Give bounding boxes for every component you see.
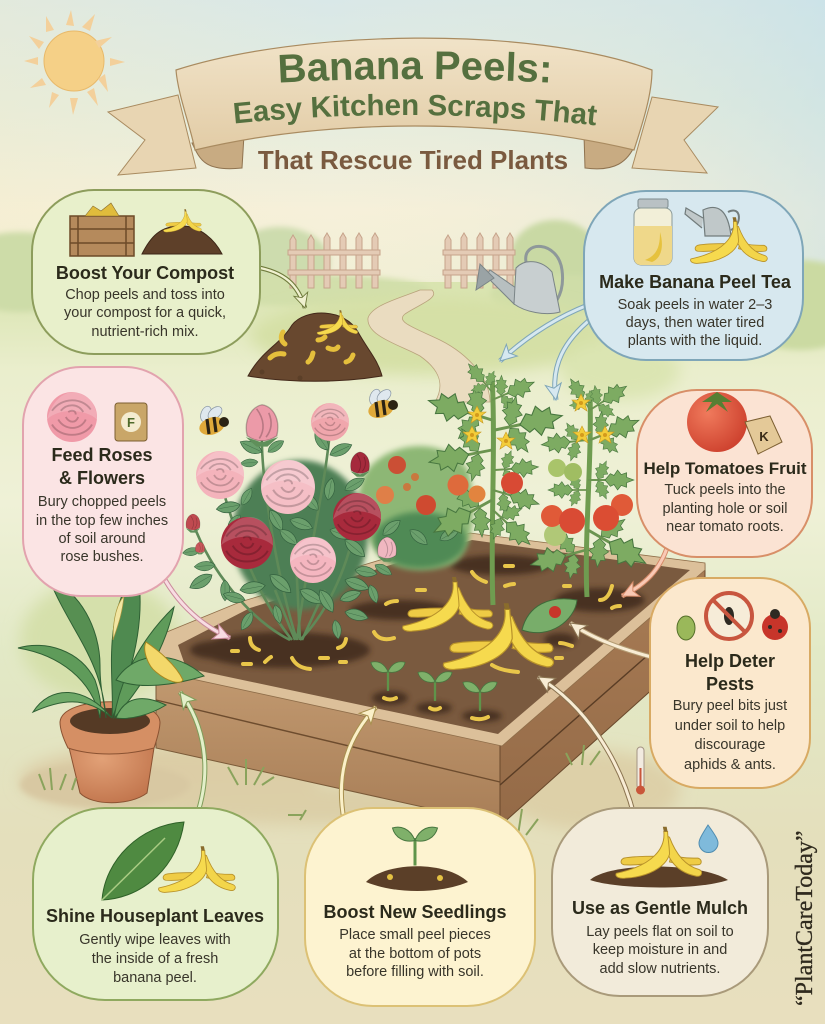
arrow: roses — [155, 560, 230, 638]
icon: ladybug — [762, 609, 788, 640]
fence: left — [288, 233, 380, 288]
icon: peel — [159, 846, 235, 892]
soft ground patches — [20, 295, 680, 830]
title banner: Easy Kitchen Scraps That — [234, 94, 597, 126]
right fold — [584, 135, 636, 169]
seedlings — [371, 662, 405, 691]
panel: feed roses: of soil around — [58, 531, 146, 547]
panel: boost your compost — [32, 190, 260, 354]
top rails — [157, 533, 705, 746]
title line 2 — [220, 115, 610, 127]
icon: jar — [634, 199, 672, 265]
icon: sun — [24, 10, 125, 115]
panel: deter pests: discourage — [695, 737, 765, 753]
title line 1 — [240, 79, 590, 85]
panel: feed roses: rose bushes. — [60, 549, 144, 565]
soil peel bits — [232, 566, 620, 719]
icon: leaf — [102, 822, 184, 900]
icon: crate — [70, 203, 134, 256]
panel: boost new seedlings: at the bottom of pots — [349, 946, 481, 962]
body: Tuck peels into the — [664, 482, 786, 498]
body: Chop peels and toss into — [65, 287, 225, 303]
arrow: compost — [255, 267, 305, 308]
heading: Boost Your Compost — [56, 263, 234, 283]
panel: boost new seedlings — [305, 808, 535, 1006]
title banner: Banana Peels: — [280, 52, 549, 82]
body: Soak peels in water 2–3 — [618, 297, 772, 313]
heading: Help Tomatoes Fruit — [643, 459, 807, 478]
left fold — [192, 135, 244, 169]
panel: feed roses — [23, 367, 183, 596]
right wood — [500, 565, 705, 826]
leaves — [18, 567, 204, 718]
tomato plant right — [524, 369, 661, 597]
heading: Use as Gentle Mulch — [572, 898, 748, 918]
icon: soil — [590, 866, 728, 888]
icon: fertilizer bag — [115, 403, 147, 441]
body: Bury peel bits just — [673, 698, 787, 714]
arrow: tea to left tomato — [500, 305, 588, 361]
arrow: mulch — [538, 677, 634, 815]
arrow: shine — [180, 692, 205, 815]
banana peels on soil — [403, 577, 493, 631]
icon: prohibition sign — [706, 593, 752, 639]
panel: shine houseplant leaves: the inside of a fresh — [92, 951, 218, 967]
icon: peel — [691, 217, 767, 263]
panel: feed roses: in the top few inches — [36, 513, 168, 529]
background ground — [0, 282, 825, 1024]
watering can — [476, 246, 563, 314]
pot — [66, 735, 156, 803]
panel: banana peel tea: days, then water tired — [626, 315, 764, 331]
arrow: pests — [570, 623, 655, 658]
icon: peel — [616, 827, 702, 878]
panel: gentle mulch — [552, 808, 768, 996]
heading: Help Deter — [685, 651, 775, 671]
arrow: tomatoes — [622, 545, 668, 596]
panel: help tomatoes: near tomato roots. — [666, 519, 784, 535]
panel: boost your compost: nutrient-rich mix. — [91, 324, 199, 340]
title line 3: That Rescue Tired Plants — [258, 145, 568, 175]
icon: bee right — [366, 387, 398, 421]
fence: right — [443, 233, 515, 288]
title banner — [107, 38, 719, 176]
body: Gently wipe leaves with — [79, 932, 231, 948]
body: Bury chopped peels — [38, 494, 166, 510]
soil — [178, 540, 690, 734]
heading: Feed Roses — [51, 445, 153, 465]
body: Lay peels flat on soil to — [586, 924, 734, 940]
right ribbon tail — [632, 97, 718, 173]
arrow: tea to right tomato — [555, 318, 592, 400]
panel: boost your compost: your compost for a quick, — [64, 305, 226, 321]
icon: small watering can — [685, 207, 739, 236]
grass tufts — [39, 745, 600, 835]
heading: Shine Houseplant Leaves — [46, 906, 264, 926]
panel: deter pests: under soil to help — [675, 718, 785, 734]
icon: tag: K — [759, 429, 769, 444]
heading: Boost New Seedlings — [323, 902, 507, 922]
panel: banana peel tea — [584, 191, 803, 360]
icon: seedling in soil — [366, 827, 468, 891]
banner body — [176, 38, 652, 150]
icon: green aphid — [677, 616, 695, 640]
body: Place small peel pieces — [339, 927, 491, 943]
rose bush — [182, 403, 397, 640]
icon: soil with peel — [142, 209, 222, 254]
panel: shine houseplant leaves: banana peel. — [113, 970, 197, 986]
arrow: seedlings — [341, 707, 376, 820]
heading: Make Banana Peel Tea — [599, 272, 792, 292]
banana on leaf — [145, 642, 183, 682]
distant trees and hills — [0, 220, 825, 350]
panel: shine houseplant leaves — [33, 808, 278, 1000]
panel: gentle mulch: keep moisture in and — [593, 942, 727, 958]
panel: help tomatoes — [637, 390, 812, 557]
panel: banana peel tea: plants with the liquid. — [628, 333, 762, 349]
panel: deter pests: aphids & ants. — [684, 757, 776, 773]
ladybug leaf — [522, 599, 577, 633]
compost pile — [248, 310, 382, 381]
icon: tag — [745, 416, 782, 454]
icon: water drop — [699, 825, 718, 852]
panel: deter pests: Pests — [706, 674, 754, 694]
icon: fertilizer bag: F — [127, 415, 135, 430]
houseplant — [18, 567, 204, 807]
panel: feed roses: & Flowers — [59, 468, 145, 488]
icon: tomato — [687, 392, 747, 452]
icon: bee left — [197, 404, 229, 438]
panel: help tomatoes: planting hole or soil — [663, 501, 787, 517]
panel: deter pests — [650, 578, 810, 788]
front wood — [156, 640, 502, 824]
pot rim — [60, 702, 160, 754]
left ribbon tail — [108, 95, 196, 175]
tomato plant left — [419, 353, 569, 605]
panel: boost new seedlings: before filling with soil. — [346, 964, 484, 980]
panel: gentle mulch: add slow nutrients. — [600, 961, 720, 977]
icon: rose — [47, 392, 97, 442]
raised garden bed — [156, 533, 705, 826]
dirt patch — [20, 763, 190, 807]
background sky — [0, 0, 825, 300]
berry bush — [359, 446, 473, 570]
thermometer — [636, 747, 645, 794]
garden path — [368, 290, 490, 402]
dark soil patches — [190, 555, 645, 722]
brand credit: “PlantCareToday” — [792, 830, 818, 1006]
